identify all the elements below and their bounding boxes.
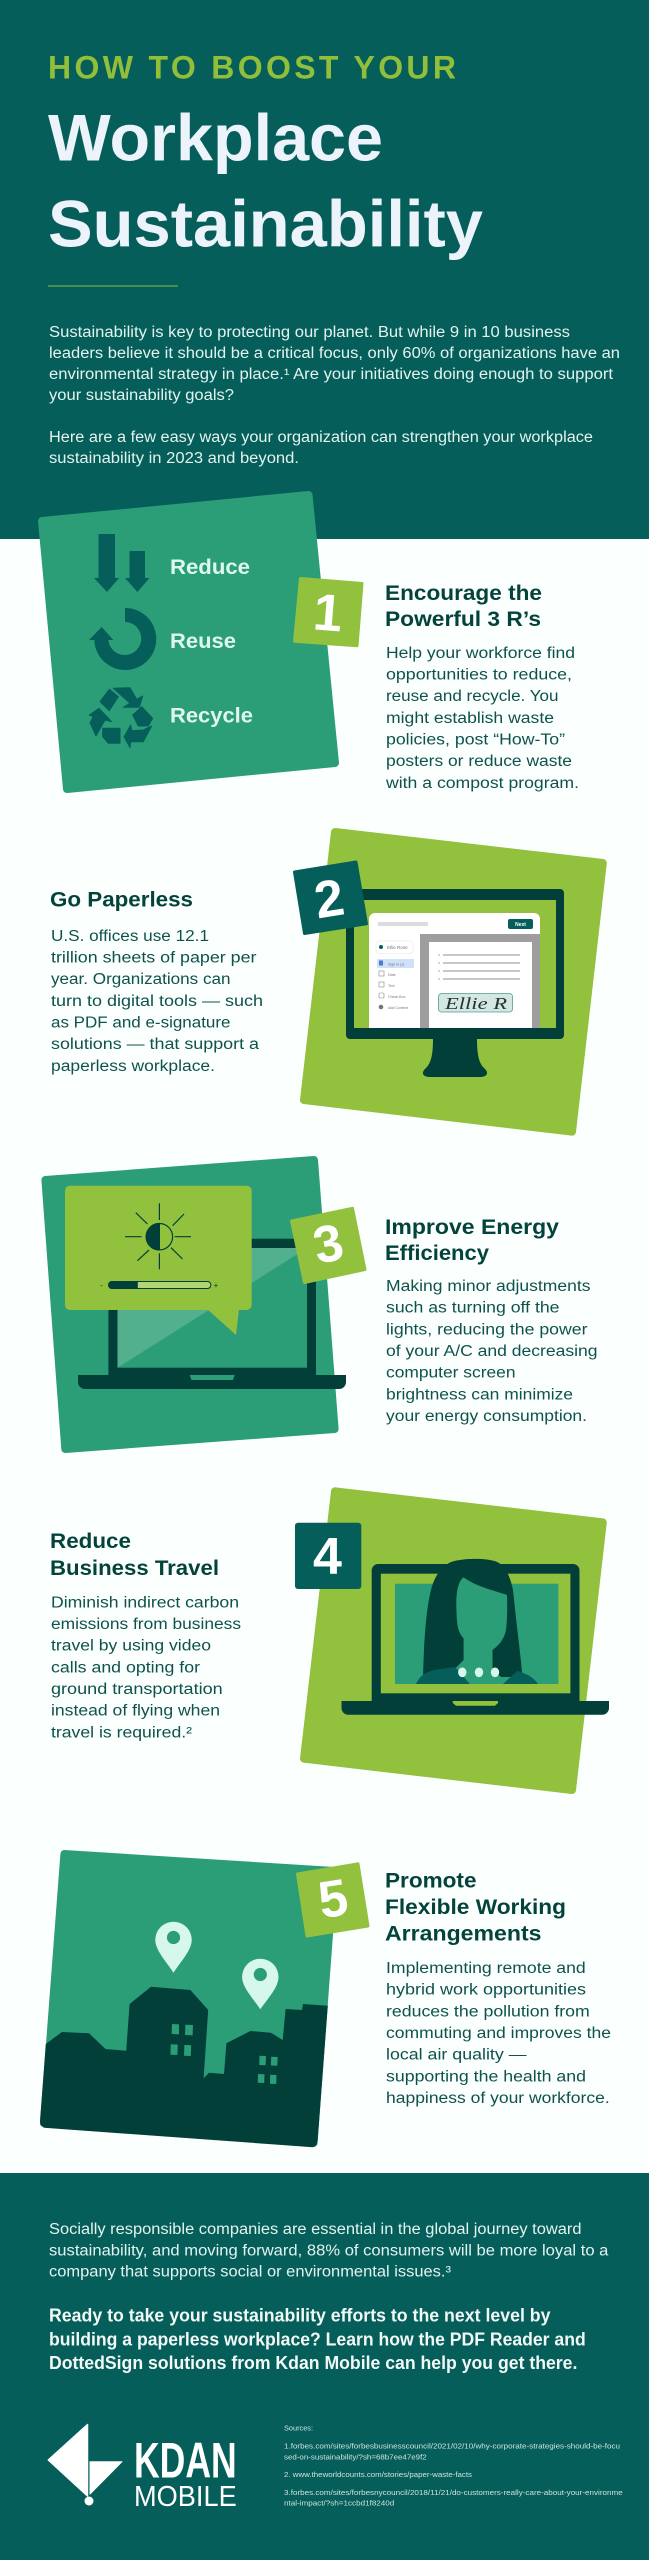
heading 4: Business Travel [50,1557,219,1580]
call to action [49,2306,586,2373]
panel: green background [44,1854,334,2143]
body 3: such as turning off the [386,1300,560,1317]
title: Sustainability [48,186,483,260]
heading 5: Flexible Working [385,1896,566,1919]
body 2 [51,928,263,1075]
heading 2: Go Paperless [50,888,193,912]
body 4: ground transportation [51,1681,223,1698]
section 5: flexible working [40,1854,611,2147]
call to action: building a paperless workplace? Learn how the PDF Reader and [49,2330,586,2350]
body 5: commuting and improves the [386,2025,611,2042]
section 2: go paperless [50,832,603,1132]
icon: city skyline [40,1987,328,2147]
body 3: of your A/C and decreasing [386,1343,598,1360]
badge: number 4 [295,1523,361,1589]
title: Workplace [48,100,383,174]
closing text [49,2221,609,2281]
sources: Sources: [284,2425,313,2432]
logo: Kdan Mobile [48,2424,237,2513]
body 4: travel is required.² [51,1724,192,1741]
heading 1: Encourage the [385,582,542,605]
body 1: reuse and recycle. You [386,688,558,705]
icon: desktop monitor [346,889,564,1077]
body 5: Implementing remote and [386,1960,586,1977]
badge: number 2: 2 [310,869,348,930]
panel: lime background [304,1491,603,1790]
icon: reduce arrows [94,534,150,592]
body 1: with a compost program. [385,775,579,792]
badge: number 2 [294,862,366,934]
sources [284,2425,623,2508]
title [48,100,483,260]
panel: footer [0,2173,649,2560]
body 2: trillion sheets of paper per [51,950,256,966]
icon: recycle [89,688,153,748]
body 4: travel by using video [51,1638,211,1655]
call to action: DottedSign solutions from Kdan Mobile can help you get there. [49,2353,577,2373]
app window [369,913,540,1028]
body 1: posters or reduce waste [386,753,572,770]
sources: 1.forbes.com/sites/forbesbusinesscouncil/2021/02/10/why-corporate-strategies-should-be-focu [284,2443,620,2450]
intro text: your sustainability goals? [49,387,234,404]
body 4: Diminish indirect carbon [51,1594,239,1611]
body 4 [51,1594,241,1741]
body 5: reduces the pollution from [386,2003,590,2020]
signature field: Ellie R [444,994,508,1013]
icon: map pin right [242,1959,278,2009]
panel: header [0,0,649,539]
body 4: instead of flying when [51,1703,220,1720]
sidebar: Text [388,984,395,988]
panel: lime background [304,832,603,1132]
sidebar: Date [388,973,396,977]
heading 4: Reduce [50,1530,131,1553]
logo: Kdan Mobile: MOBILE [134,2481,237,2513]
intro text: leaders believe it should be a critical focus, only 60% of organizations have an [49,345,620,362]
body 2: solutions — that support a [51,1036,259,1053]
body 2: turn to digital tools — such [51,993,263,1010]
labels: reduce reuse recycle: Reduce [170,556,250,579]
icon: laptop video call [342,1559,609,1715]
body 1: Help your workforce find [386,645,575,662]
intro text: sustainability in 2023 and beyond. [49,450,299,467]
section 3: energy efficiency [45,1160,597,1449]
heading 4 [50,1530,219,1580]
icon: brightness sun [125,1203,191,1269]
app window: Next [515,922,526,928]
badge: number 1: 1 [311,583,345,644]
section 4: business travel [50,1491,609,1790]
body 5: local air quality — [386,2047,527,2064]
body 3: brightness can minimize [386,1386,573,1403]
sources: 2. www.theworldcounts.com/stories/paper-waste-facts [284,2472,473,2479]
body 1: opportunities to reduce, [386,666,572,684]
intro text [49,324,620,467]
brightness slider: + [214,1281,219,1290]
labels: reduce reuse recycle: Recycle [170,704,253,728]
closing text: Socially responsible companies are essential in the global journey toward [49,2221,582,2238]
brightness slider [100,1281,219,1290]
panel: reduce reuse recycle [42,495,335,789]
person on screen [416,1559,538,1684]
labels: reduce reuse recycle [170,556,253,728]
closing text: company that supports social or environmental issues.³ [49,2264,451,2281]
sidebar: Add Content [388,1006,408,1010]
body 5: hybrid work opportunities [386,1982,586,1999]
panel: green background [45,1160,335,1449]
body 2: year. Organizations can [51,971,230,988]
body 2: as PDF and e-signature [51,1014,230,1032]
heading 3 [385,1216,559,1265]
badge: number 3 [292,1208,365,1282]
signature field [438,994,512,1013]
sources: 3.forbes.com/sites/forbesnycouncil/2018/11/21/do-customers-really-care-about-your-environme [284,2490,623,2497]
icon: map pin left [155,1922,192,1973]
intro text: Sustainability is key to protecting our planet. But while 9 in 10 business [49,324,570,341]
heading 5 [385,1869,566,1946]
body 5: supporting the health and [386,2068,586,2085]
sidebar: Check Box [388,995,406,999]
body 1: policies, post “How-To” [386,732,565,748]
body 5: happiness of your workforce. [386,2090,610,2107]
logo: Kdan Mobile: KDAN [134,2433,237,2489]
body 3: Making minor adjustments [386,1278,591,1295]
sidebar: Ellie Rose [387,945,408,950]
sidebar: Sign in (1) [388,962,404,966]
heading 5: Promote [385,1869,476,1892]
heading 1 [385,582,542,631]
sidebar [376,941,414,1010]
brightness slider: - [100,1281,103,1290]
sources: ntal-impact/?sh=1ccbd1f8240d [284,2501,394,2508]
labels: reduce reuse recycle: Reuse [170,630,236,653]
closing text: sustainability, and moving forward, 88% of consumers will be more loyal to a [49,2243,609,2260]
body 4: emissions from business [51,1616,241,1633]
badge: number 4: 4 [313,1528,342,1586]
icon: reuse arrow [89,608,156,670]
heading 5: Arrangements [385,1923,542,1946]
body 3 [386,1278,598,1425]
body 3: lights, reducing the power [386,1321,588,1338]
body 1: might establish waste [386,710,554,727]
title kicker: HOW TO BOOST YOUR [48,50,456,86]
callout: brightness speech bubble [65,1186,252,1335]
intro text: Here are a few easy ways your organization can strengthen your workplace [49,429,593,446]
body 2: U.S. offices use 12.1 [51,928,209,945]
badge: number 5 [298,1864,368,1936]
sources: sed-on-sustainability/?sh=68b7ee47e9f2 [284,2454,427,2461]
heading 3: Efficiency [385,1242,489,1265]
body 2: paperless workplace. [51,1058,215,1075]
section 1: three Rs [42,495,579,792]
badge: number 3: 3 [308,1213,348,1276]
icon: laptop [78,1239,346,1389]
intro text: environmental strategy in place.¹ Are your initiatives doing enough to support [49,366,614,383]
badge: number 5: 5 [314,1869,352,1930]
body 4: calls and opting for [51,1659,200,1676]
heading 1: Powerful 3 R’s [385,608,541,631]
heading 3: Improve Energy [385,1216,559,1239]
badge: number 1 [294,578,362,646]
body 1 [385,645,579,792]
call to action: Ready to take your sustainability efforts to the next level by [49,2306,550,2326]
body 3: your energy consumption. [386,1408,587,1425]
body 5 [386,1960,611,2107]
body 3: computer screen [386,1365,516,1382]
